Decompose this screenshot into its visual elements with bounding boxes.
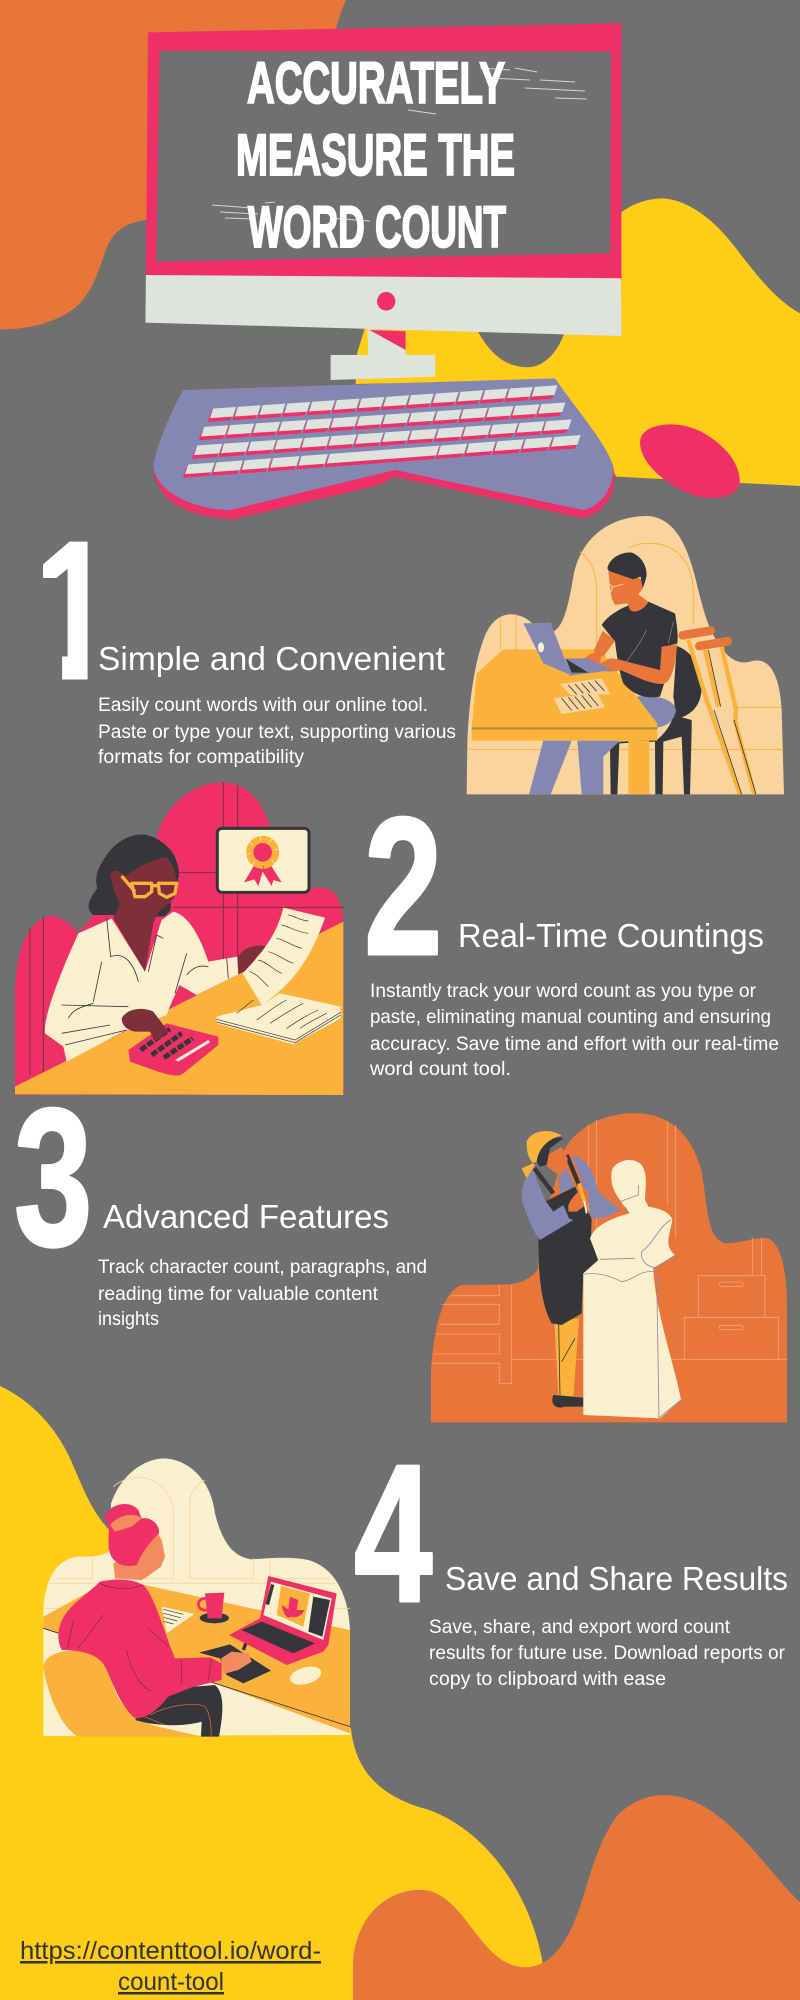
- stand stripe: [369, 330, 406, 350]
- mouse: [640, 424, 740, 498]
- glasses: [122, 876, 177, 897]
- bandana: [522, 1131, 562, 1178]
- illustration: person typing on laptop: [467, 516, 784, 794]
- keyboard: [153, 378, 614, 519]
- section 4 body: results for future use. Download reports or: [429, 1643, 786, 1664]
- section 4 heading: Save and Share Results: [445, 1560, 788, 1597]
- link text: count-tool: [118, 1968, 224, 1996]
- papers: [553, 678, 611, 714]
- keys row 1: [209, 390, 556, 417]
- scrunchie: [110, 1515, 142, 1532]
- link text: https://contenttool.io/word-: [20, 1937, 321, 1965]
- pants: [554, 1318, 579, 1397]
- illustration: sculptor with statue: [431, 1113, 787, 1422]
- section 1 body: Paste or type your text, supporting various: [98, 722, 456, 743]
- keys row 3: [193, 424, 570, 454]
- section 3 number: 3: [14, 1068, 92, 1287]
- mug and saucer: [200, 1613, 229, 1623]
- tablet: [199, 1644, 271, 1683]
- section 2 body: word count tool.: [369, 1059, 511, 1080]
- hair: [89, 834, 179, 917]
- hand on paper: [237, 946, 267, 974]
- computer mouse: [288, 1663, 323, 1688]
- shoe: [552, 1395, 583, 1408]
- hair: [105, 1504, 159, 1566]
- desk: [43, 1585, 350, 1733]
- keys row 4: [184, 440, 580, 473]
- yellow blob bottom: [0, 1386, 543, 2000]
- orange backdrop: [431, 1113, 787, 1422]
- shirt: [45, 912, 238, 1062]
- title line 1: ACCURATELY: [247, 51, 505, 116]
- illustration: woman on drawing tablet: [43, 1458, 350, 1737]
- section 3 body: [98, 1257, 427, 1330]
- bust statue: [583, 1160, 681, 1418]
- section 1 body: Easily count words with our online tool.: [98, 695, 428, 716]
- desk: [472, 649, 657, 741]
- section 1 body: formats for compatibility: [98, 747, 305, 768]
- section 3 heading: Advanced Features: [103, 1198, 389, 1235]
- section 3 body: Track character count, paragraphs, and: [98, 1257, 427, 1278]
- head: [540, 1147, 568, 1175]
- monitor chin: [145, 275, 621, 336]
- section 3 body: reading time for valuable content: [98, 1284, 379, 1305]
- section 1 number: 1: [34, 500, 117, 720]
- section 1 heading: Simple and Convenient: [98, 640, 445, 677]
- hand and pen: [221, 1652, 252, 1674]
- paper: [162, 1607, 194, 1633]
- laptop: [565, 658, 613, 676]
- shirt: [522, 1155, 620, 1240]
- orange blob bottom right: [353, 1795, 800, 2000]
- apron straps: [534, 1155, 579, 1193]
- apron: [538, 1187, 598, 1325]
- section 1 body: [98, 695, 456, 768]
- section 2 body: [369, 981, 779, 1080]
- sweater: [58, 1579, 222, 1718]
- paper in hand: [243, 908, 325, 1005]
- section 2 body: Instantly track your word count as you type or: [370, 981, 757, 1002]
- legs: [135, 1685, 222, 1737]
- keyboard body: [153, 378, 613, 510]
- shirt: [602, 602, 678, 697]
- link text: [20, 1937, 321, 1996]
- laptop: [229, 1576, 337, 1665]
- arms and hands: [585, 593, 677, 684]
- section 2 number: 2: [364, 777, 442, 996]
- illustration: woman with calculator and certificate: [15, 782, 343, 1095]
- keyboard underside: [153, 467, 614, 519]
- hand on calculator: [122, 1009, 168, 1042]
- face: [608, 570, 645, 605]
- monitor screen: [156, 51, 611, 262]
- section 2 body: accuracy. Save time and effort with our real-time: [370, 1034, 779, 1055]
- computer monitor: [145, 23, 621, 380]
- cream backdrop: [43, 1458, 350, 1736]
- calculator: [128, 1023, 218, 1076]
- chair: [43, 1651, 202, 1737]
- legs: [529, 696, 676, 794]
- yellow blob top right: [356, 198, 800, 486]
- section 4 number: 4: [354, 1424, 433, 1643]
- hair: [537, 1138, 563, 1167]
- peach backdrop: [467, 516, 784, 794]
- section 3 body: insights: [98, 1309, 159, 1330]
- hand and chisel: [568, 1190, 588, 1212]
- section 2 body: paste, eliminating manual counting and ensuring: [370, 1007, 771, 1028]
- section 4 body: Save, share, and export word count: [429, 1617, 731, 1638]
- pink backdrop: [15, 782, 343, 1095]
- chair: [610, 646, 702, 794]
- crutches: [683, 631, 756, 794]
- certificate: [217, 828, 309, 892]
- section 4 body: copy to clipboard with ease: [429, 1669, 666, 1690]
- glasses: [604, 584, 612, 592]
- neck and face: [113, 1532, 165, 1580]
- hair: [607, 553, 647, 588]
- desk: [15, 922, 343, 1095]
- paper stack: [217, 993, 341, 1044]
- face and neck: [110, 857, 177, 972]
- title line 2: MEASURE THE: [236, 123, 515, 188]
- keys row 2: [200, 407, 564, 435]
- section 4 body: [429, 1617, 786, 1690]
- power button: [377, 292, 395, 311]
- monitor stand: [331, 329, 435, 380]
- title line 3: WORD COUNT: [248, 195, 506, 260]
- rosette ribbon: [244, 865, 282, 886]
- section 2 heading: Real-Time Countings: [458, 917, 764, 954]
- title: [236, 51, 515, 260]
- orange blob top left: [0, 0, 346, 329]
